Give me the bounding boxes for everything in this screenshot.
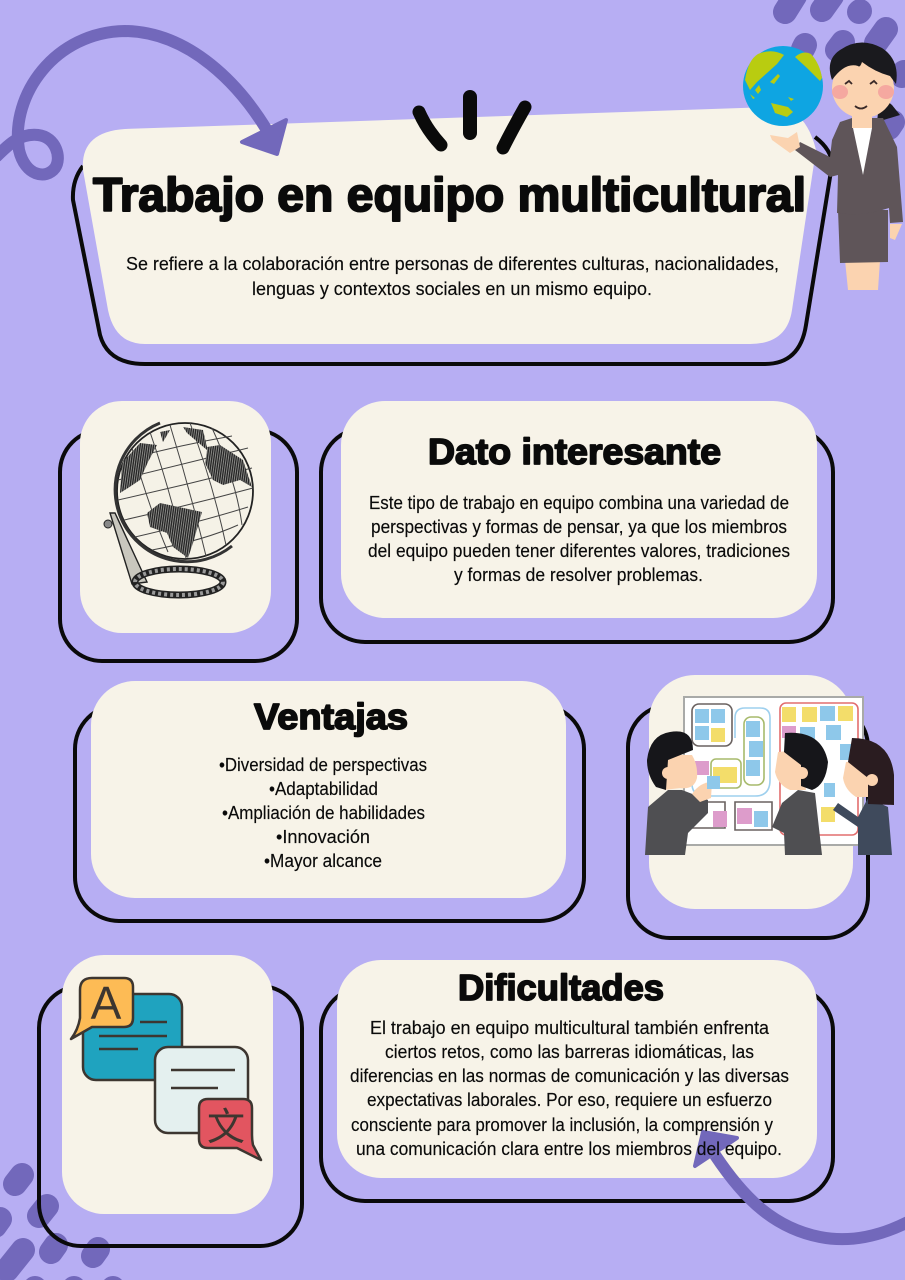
icon: translation chat bubbles: 文 xyxy=(207,1107,245,1149)
list: ventajas: •Adaptabilidad xyxy=(269,778,378,799)
text: dato interesante: Este tipo de trabajo en equipo combina una variedad de xyxy=(369,492,789,513)
woman: hair back xyxy=(877,95,900,122)
woman: right hand xyxy=(890,224,902,240)
decorative dashes: bottom left xyxy=(0,1175,113,1280)
icon: vintage globe xyxy=(104,423,253,595)
text: dificultades: El trabajo en equipo multicultural también enfrenta xyxy=(370,1017,770,1038)
list: ventajas: •Innovación xyxy=(276,826,370,847)
list: ventajas: •Mayor alcance xyxy=(264,850,382,871)
header description xyxy=(126,253,779,299)
icon: earth globe xyxy=(743,46,823,126)
text: dato interesante xyxy=(368,492,790,585)
woman: facial features xyxy=(845,81,877,108)
text: dato interesante: perspectivas y formas de pensar, ya que los miembros xyxy=(371,516,787,537)
icon: translation chat bubbles: A xyxy=(91,977,122,1029)
panel: ventajas xyxy=(75,681,584,921)
text: dificultades: diferencias en las normas de comunicación y las diversas xyxy=(350,1065,789,1086)
woman: neck xyxy=(852,108,872,128)
woman: hand xyxy=(770,132,800,153)
heading: ventajas: Ventajas xyxy=(254,696,408,737)
woman: face xyxy=(832,58,894,118)
icon: person right xyxy=(824,738,894,855)
text: dificultades: una comunicación clara entre los miembros del equipo. xyxy=(356,1138,782,1159)
decorative dashes: top right xyxy=(785,0,904,128)
text: dificultades: ciertos retos, como las barreras idiomáticas, las xyxy=(385,1041,754,1062)
woman: cheeks xyxy=(832,85,894,99)
arrow: top curved xyxy=(0,31,286,174)
icon: person left xyxy=(645,731,720,855)
icon: person centre xyxy=(772,733,828,855)
icon: planning board xyxy=(684,697,863,845)
woman: jacket xyxy=(795,118,903,223)
heading: dato interesante: Dato interesante xyxy=(428,431,721,472)
text: dificultades xyxy=(350,1017,789,1159)
woman: shirt xyxy=(853,128,872,175)
icon: translation chat bubbles xyxy=(71,977,261,1160)
heading: dificultades: Dificultades xyxy=(458,967,664,1008)
panel: header xyxy=(73,107,832,364)
panel: globe image xyxy=(60,401,297,661)
text: dato interesante: y formas de resolver problemas. xyxy=(454,564,703,585)
header description: lenguas y contextos sociales en un mismo equipo. xyxy=(252,278,652,299)
list: ventajas: •Ampliación de habilidades xyxy=(222,802,425,823)
panel: translation image xyxy=(39,955,302,1246)
header description: Se refiere a la colaboración entre personas de diferentes culturas, nacionalidades, xyxy=(126,253,779,274)
arrow: bottom curved xyxy=(695,1132,905,1239)
woman: legs xyxy=(845,260,880,290)
panel: team image xyxy=(628,675,894,938)
icon: woman presenting xyxy=(770,42,903,290)
woman: skirt xyxy=(838,210,888,263)
panel: dato interesante xyxy=(321,401,833,642)
icon: burst strokes xyxy=(419,97,525,148)
text: dato interesante: del equipo pueden tener diferentes valores, tradiciones xyxy=(368,540,790,561)
text: dificultades: consciente para promover la inclusión, la comprensión y xyxy=(351,1114,774,1135)
panel: dificultades xyxy=(321,960,905,1239)
list: ventajas: •Diversidad de perspectivas xyxy=(219,754,427,775)
list: ventajas xyxy=(219,754,427,871)
text: dificultades: expectativas laborales. Por eso, requiere un esfuerzo xyxy=(367,1089,772,1110)
woman: hair xyxy=(830,42,897,84)
title: Trabajo en equipo multicultural xyxy=(93,168,806,221)
